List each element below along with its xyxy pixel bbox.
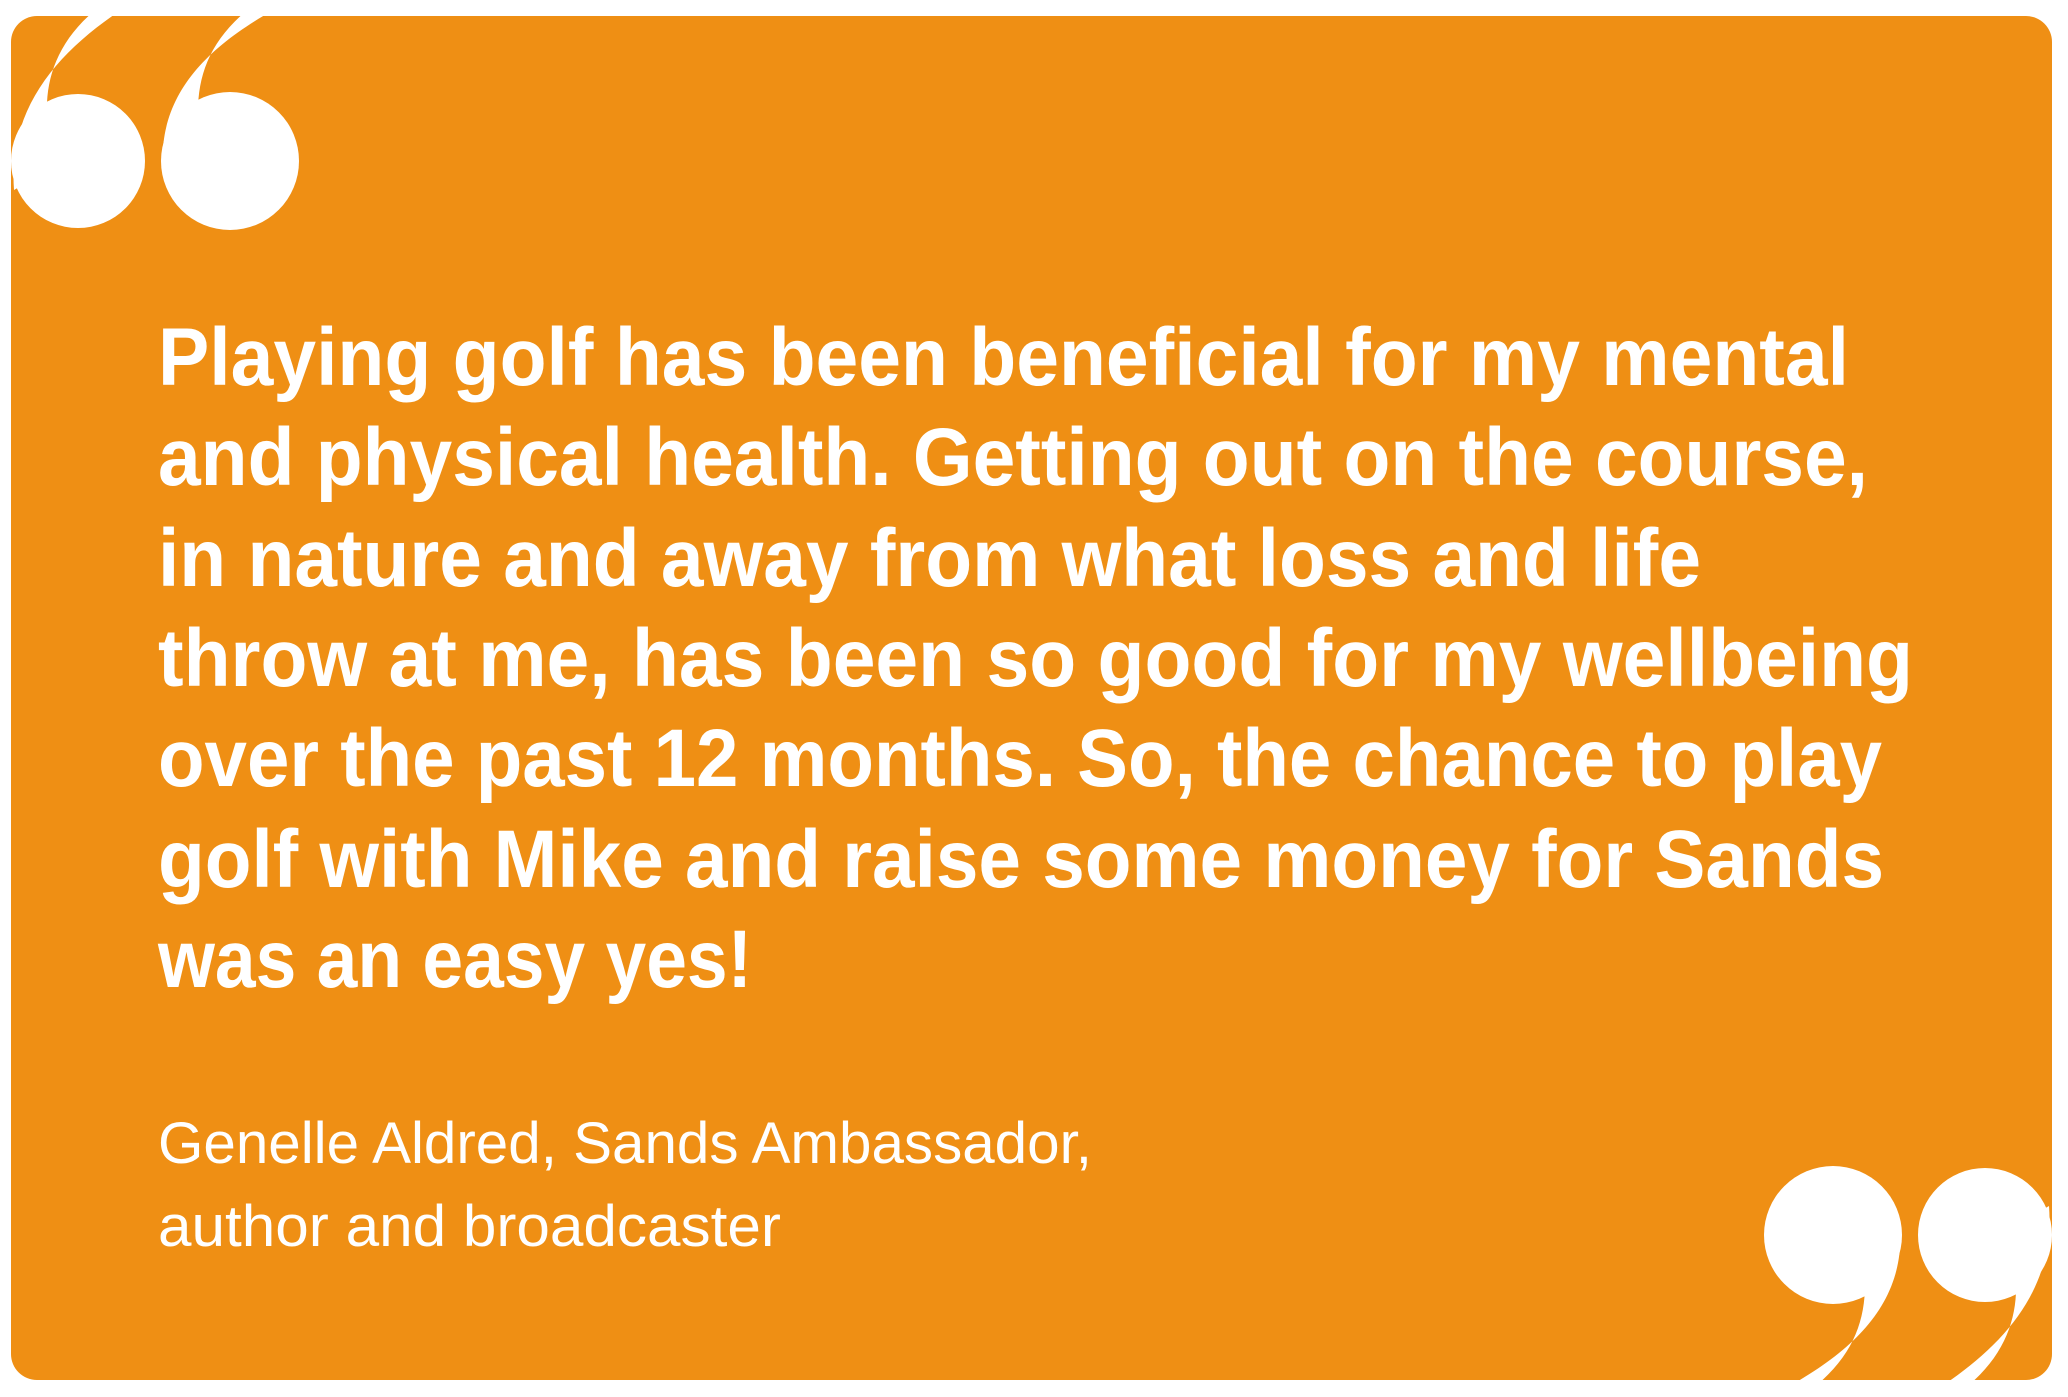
text block: quote: over the past 12 months. So, the chance to play	[158, 713, 1882, 804]
icon: closing quote marks	[1764, 1166, 2052, 1384]
icon: opening quote marks	[11, 12, 299, 230]
text block: attribution: author and broadcaster	[158, 1194, 781, 1259]
text block: attribution: Genelle Aldred, Sands Ambassador,	[158, 1111, 1092, 1176]
text block: quote: in nature and away from what loss and life	[158, 513, 1701, 604]
text block: attribution	[158, 1111, 1092, 1259]
text block: quote: golf with Mike and raise some money for Sands	[158, 814, 1884, 905]
text block: quote	[157, 312, 1913, 1005]
text block: quote: throw at me, has been so good for my wellbeing	[158, 613, 1913, 704]
text block: quote: Playing golf has been beneficial for my mental	[158, 312, 1849, 403]
text block: quote: was an easy yes!	[157, 914, 752, 1005]
text block: quote: and physical health. Getting out on the course,	[158, 412, 1868, 503]
